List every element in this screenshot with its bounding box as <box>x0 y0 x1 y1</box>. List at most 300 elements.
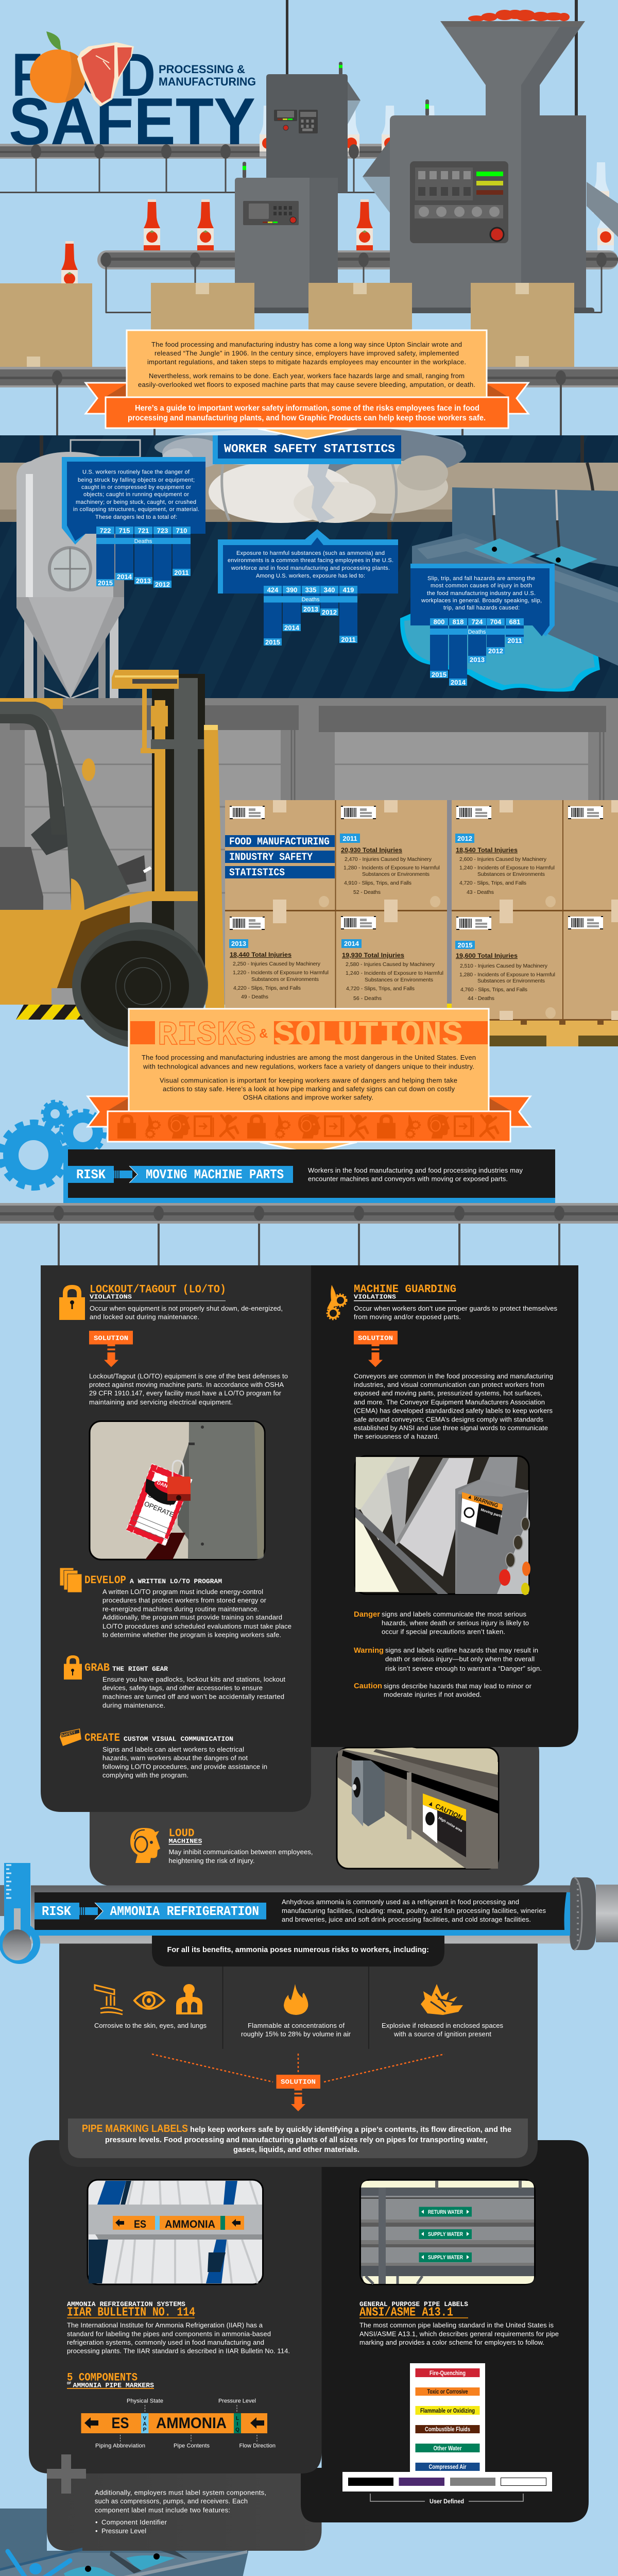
diagram: ammonia pipe marker components: AMMONIA <box>156 2415 227 2432</box>
stats: 2015: Substances or Environments <box>477 978 545 984</box>
panel: risks and solutions intro: actions to stay safe. Here’s a look at how pipe marking and safety signs can cut down on costly <box>163 1085 455 1093</box>
panel: iiar bulletin: IIAR BULLETIN NO. 114 <box>67 2306 195 2319</box>
heading: food manufacturing industry safety statistics: STATISTICS <box>229 867 285 879</box>
diagram: ammonia pipe marker components: Pressure Level <box>218 2398 256 2404</box>
illustration: lockout tag on panel door: DANGER <box>156 1480 179 1494</box>
bar chart: slip deaths: Deaths <box>468 629 486 635</box>
icon: steak <box>77 42 134 107</box>
stats: 2013: 4,220 - Slips, Trips, and Falls <box>233 985 301 991</box>
panel: ansi asme: ANSI/ASME A13.1, which describes general requirements for pipe <box>359 2330 559 2338</box>
panel: component labels: such as compressors, pumps, and receivers. Each <box>95 2497 248 2505</box>
ribbon: guide statement: processing and manufacturing plants, and how Graphic Products can help keep those workers safe. <box>128 414 486 422</box>
bar chart: struck-by deaths <box>96 527 191 588</box>
stats: 2014: 56 - Deaths <box>353 995 382 1002</box>
bar chart: exposure deaths: 335 <box>305 586 316 594</box>
panel: loud machines: heightening the risk of injury. <box>169 1857 254 1865</box>
stats: 2011 <box>340 834 440 895</box>
sign word: danger: Danger <box>354 1610 380 1619</box>
panel: component labels: Pressure Level <box>101 2527 146 2535</box>
illustration: conveyor guard with warning label: ▲ WARNING <box>467 1493 499 1509</box>
panel: ansi asme: GENERAL PURPOSE PIPE LABELS <box>359 2300 468 2308</box>
sign word: warning: death or serious injury—but only when the overall <box>385 1655 535 1663</box>
icon: torso with lungs <box>176 1984 202 2014</box>
bar chart: struck-by deaths: 2014 <box>117 573 132 581</box>
panel: component labels: • <box>95 2527 98 2535</box>
panel: machine guarding: safe around conveyors; CEMA’s designs comply with standards <box>354 1416 544 1423</box>
stats: 2014: 2014 <box>344 940 359 947</box>
panel: ansi asme <box>301 2140 589 2522</box>
step: create: CREATE <box>84 1732 120 1744</box>
icon: flame <box>284 1984 308 2015</box>
callout: pipe marking labels: pressure levels. Food processing and manufacturing plants of all sizes rely on pipes for transporting water, <box>105 2136 488 2144</box>
icon: head with ear protection <box>130 1828 160 1863</box>
diagram: ammonia pipe marker components: Physical State <box>127 2398 163 2404</box>
step: develop: DEVELOP <box>84 1574 126 1587</box>
tomatoes in hopper <box>468 10 570 22</box>
illustration: general purpose pipe labels: SUPPLY WATER <box>428 2231 463 2238</box>
callout: slips trips falls: most common causes of injury in both <box>431 583 532 589</box>
sign word: caution: signs describe hazards that may lead to minor or <box>384 1682 532 1690</box>
gears <box>1 1101 105 1188</box>
solution marker <box>276 2075 320 2111</box>
panel: ansi asme: The most common pipe labeling standard in the United States is <box>359 2321 554 2329</box>
icon: orange with leaf <box>30 31 85 103</box>
solution marker: SOLUTION <box>281 2078 316 2086</box>
risk tag: RISK <box>76 1167 106 1182</box>
panel: iiar bulletin: standard for labeling the pipes and components in ammonia-based <box>67 2330 271 2338</box>
bar chart: exposure deaths: 2011 <box>341 636 356 643</box>
conveyor with hanging panel rods <box>0 1203 618 1267</box>
bar chart: slip deaths: 2014 <box>451 679 466 686</box>
stats: 2014: 1,240 - Incidents of Exposure to Harmful <box>346 970 443 976</box>
section background: worker safety statistics <box>0 428 618 699</box>
heading: food safety: SAFETY <box>9 84 255 159</box>
ammonia risks panel: Explosive if released in enclosed spaces <box>382 2022 504 2029</box>
panel: iiar bulletin: AMMONIA PIPE MARKERS <box>73 2381 154 2389</box>
diagram: ammonia pipe marker components: I <box>237 2421 238 2427</box>
stats: 2013: 49 - Deaths <box>241 994 268 1000</box>
callout: pipe marking labels: help keep workers safe by quickly identifying a pipe’s contents, its flow direction, and the <box>190 2125 511 2134</box>
panel: machine guarding: VIOLATIONS <box>354 1293 396 1300</box>
step: grab: devices, safety tags, and other accessories to ensure <box>102 1684 263 1692</box>
panel: machine guarding: Occur when workers don’t use proper guards to protect themselves <box>354 1304 557 1312</box>
stats: 2011: Substances or Environments <box>362 871 430 877</box>
panel: component labels: component label must include two features: <box>95 2506 230 2514</box>
stats: 2013: 1,220 - Incidents of Exposure to Harmful <box>233 970 329 976</box>
panel: machine guarding: the seriousness of a hazard. <box>354 1432 439 1440</box>
panel: lockout tagout: maintaining and servicing electrical equipment. <box>89 1398 233 1406</box>
panel: risks and solutions intro: with technological advances and new regulations, workers face a variety of dangers unique to their industry. <box>143 1062 474 1071</box>
step: develop: Additionally, the program must provide training on standard <box>102 1614 282 1621</box>
stats: 2013: 2013 <box>231 940 246 947</box>
callout: slips trips falls: workplaces in general. Broadly speaking, slip, <box>421 598 542 604</box>
bar chart: struck-by deaths: 721 <box>138 527 149 535</box>
heading: risks and solutions: & <box>260 1026 268 1042</box>
sign word: warning <box>354 1646 542 1672</box>
sign word: warning: signs and labels outline hazards that may result in <box>385 1647 538 1654</box>
stats: 2011: 1,280 - Incidents of Exposure to Harmful <box>344 865 440 871</box>
callout: pipe marking labels <box>68 2119 528 2158</box>
bar chart: slip deaths: 818 <box>453 618 464 625</box>
icon: falling worker <box>8 2551 75 2576</box>
panels: iiar and ansi pipe labelling <box>29 2140 589 2551</box>
stats: 2012: 4,720 - Slips, Trips, and Falls <box>459 880 526 886</box>
panel: iiar bulletin: The International Institute for Ammonia Refrigeration (IIAR) has a <box>67 2321 263 2329</box>
solution marker <box>89 1331 133 1367</box>
bar chart: exposure deaths: Deaths <box>302 597 320 603</box>
bar chart: slip deaths: 681 <box>509 618 520 625</box>
bar chart: struck-by deaths: Deaths <box>134 538 152 545</box>
ammonia risks panel <box>59 1943 538 2167</box>
panel: intro copy: released “The Jungle” in 1906. In the century since, employers have improved safety, implemented <box>154 349 459 357</box>
panel: component labels: Additionally, employers must label system components, <box>95 2488 266 2497</box>
diagram: ammonia pipe marker components: Flow Direction <box>239 2443 276 2449</box>
stats: 2015: 4,760 - Slips, Trips, and Falls <box>460 987 527 993</box>
panel: lockout tagout: VIOLATIONS <box>90 1293 132 1300</box>
panel: machine guarding <box>311 1265 578 1747</box>
machine: hopper filler with control panel <box>363 10 586 308</box>
panel: ammonia benefits statement: For all its benefits, ammonia poses numerous risks to workers, including: <box>167 1945 429 1954</box>
stats: 2011: 4,910 - Slips, Trips, and Falls <box>344 880 411 886</box>
step: develop: LO/TO procedures and scheduled evaluations must take place <box>102 1622 291 1630</box>
ammonia risks panel: with a source of ignition present <box>393 2030 491 2038</box>
bar chart: struck-by deaths: 2012 <box>155 581 170 588</box>
bar chart: exposure deaths: 2014 <box>284 624 300 632</box>
panel: iiar bulletin: OF <box>67 2382 71 2386</box>
illustration: general purpose pipe labels <box>360 2180 535 2284</box>
risk banner: moving machine parts: Workers in the food manufacturing and food processing industries may <box>308 1166 523 1174</box>
bar chart: exposure deaths: 2015 <box>265 638 280 646</box>
illustration: ammonia pipe marker: AMMONIA <box>165 2218 215 2230</box>
diagram: ammonia pipe marker components: P <box>143 2427 147 2433</box>
fluid vat continuation with falling worker <box>0 2509 248 2576</box>
panel: risks and solutions intro: Visual communication is important for keeping workers aware of dangers and helping them take <box>160 1077 457 1084</box>
panel: machine guarding: Conveyors are common in the food processing and manufacturing <box>354 1372 553 1380</box>
illustration: general purpose pipe labels: RETURN WATER <box>428 2209 463 2215</box>
bar chart: struck-by deaths: 723 <box>157 527 168 535</box>
worker safety statistics heading: WORKER SAFETY STATISTICS <box>224 442 395 455</box>
machine: tall control tower <box>266 62 360 193</box>
callout: slips trips falls: the food manufacturing industry and U.S. <box>427 590 536 597</box>
sign word: danger: hazards, where death or serious injury is likely to <box>382 1619 529 1627</box>
sign word: danger: signs and labels communicate the most serious <box>382 1611 526 1618</box>
panel: risks and solutions intro <box>88 1009 530 1127</box>
step: create: hazards, warn workers about the dangers of not <box>102 1754 248 1762</box>
pipe flange <box>570 1877 596 1950</box>
heading: food safety <box>9 41 255 159</box>
illustration: conveyor guard with warning label: Moving parts <box>480 1508 503 1518</box>
callout: pipe marking labels: gases, liquids, and other materials. <box>233 2145 359 2154</box>
stacked boxes with statistics <box>225 800 618 1021</box>
stats: 2012: 18,540 Total Injuries <box>456 846 518 854</box>
stats: 2014: 2,580 - Injuries Caused by Machinery <box>346 961 435 968</box>
panel: intro copy: easily-overlooked wet floors to exposed machine parts that may cause severe bleeding, amputation, or death. <box>138 381 475 388</box>
chart: pipe label colour scheme: Toxic or Corrosive <box>427 2388 468 2395</box>
step: grab: Ensure you have padlocks, lockout kits and stations, lockout <box>102 1675 285 1683</box>
stats: 2014: Substances or Environments <box>365 977 433 983</box>
bar chart: exposure deaths: 424 <box>267 586 279 594</box>
intro text panel with ribbon <box>85 330 528 464</box>
bar chart: struck-by deaths: 2011 <box>174 569 189 577</box>
illustration: general purpose pipe labels: SUPPLY WATER <box>428 2255 463 2261</box>
stats: 2012: 43 - Deaths <box>467 889 494 895</box>
risk banner: ammonia refrigeration on pipe: manufacturing facilities, including: meat, poultry, and fish processing facilities, wineries <box>282 1907 546 1914</box>
bar chart: exposure deaths <box>264 586 357 646</box>
stats: 2013: 18,440 Total Injuries <box>230 951 291 958</box>
bar chart: struck-by deaths: 715 <box>119 527 130 535</box>
forklift <box>0 670 225 1048</box>
chart: pipe label colour scheme: Flammable or Oxidizing <box>420 2407 475 2414</box>
sign word: caution: moderate injuries if not avoided. <box>384 1691 482 1698</box>
sign word: warning: Warning <box>354 1646 384 1655</box>
stats: 2012: 1,240 - Incidents of Exposure to Harmful <box>459 865 555 871</box>
panel: ammonia benefits statement <box>152 1936 444 1967</box>
panel: lockout tagout: protect against moving machine parts. In accordance with OSHA <box>89 1381 284 1388</box>
illustration: caution label on conveyor: High noise area <box>438 1817 463 1833</box>
stats: 2015: 19,600 Total Injuries <box>456 952 518 959</box>
smoke and cracked pipe <box>154 428 466 523</box>
hero scene: production line <box>0 0 618 436</box>
callout: struck by / caught in <box>62 457 205 588</box>
stats: 2015: 2,510 - Injuries Caused by Machinery <box>460 963 548 969</box>
bar chart: struck-by deaths: 2015 <box>98 579 113 587</box>
panel: risks and solutions intro: The food processing and manufacturing industries are among the most dangerous in the United States. Even <box>142 1054 476 1061</box>
stats: 2015: 1,280 - Incidents of Exposure to Harmful <box>459 972 555 978</box>
panel: ansi asme: ANSI/ASME A13.1 <box>359 2306 453 2319</box>
callout: slips trips falls: trip, and fall hazards caused: <box>443 605 520 611</box>
icon: padlock small <box>64 1655 82 1680</box>
step: create: CUSTOM VISUAL COMMUNICATION <box>124 1735 233 1743</box>
title block <box>9 31 256 159</box>
risk banner: ammonia refrigeration on pipe: and breweries, juice and soft drink processing facilities, and cold storage facilities. <box>282 1916 531 1923</box>
panel: lockout tagout: 29 CFR 1910.147, every facility must have a LO/TO program for <box>89 1389 282 1397</box>
stats: 2011: 2011 <box>342 835 357 842</box>
lower conveyor <box>97 162 618 313</box>
stats: 2014: 4,720 - Slips, Trips, and Falls <box>346 986 415 992</box>
callout: struck by / caught in: U.S. workers routinely face the danger of <box>82 469 190 475</box>
sign word: danger: occur if special precautions aren’t taken. <box>382 1628 505 1635</box>
step: create <box>60 1728 267 1779</box>
diagram: ammonia pipe marker components: V <box>143 2416 147 2421</box>
step: create: following LO/TO procedures, and provide assistance in <box>102 1763 267 1770</box>
stats: 2012: 2,600 - Injuries Caused by Machinery <box>459 856 547 862</box>
bar chart: exposure deaths: 2012 <box>322 608 337 616</box>
illustration: lockout tag on panel door: OPERATE <box>143 1500 176 1519</box>
step: grab: GRAB <box>84 1662 110 1674</box>
ammonia risks panel: roughly 15% to 28% by volume in air <box>241 2030 351 2038</box>
diagram: ammonia pipe marker components: ES <box>111 2415 129 2432</box>
solution marker: SOLUTION <box>94 1334 128 1342</box>
diagram: ammonia pipe marker components: Pipe Contents <box>174 2443 210 2449</box>
heading: risks and solutions: RISKS <box>158 1016 256 1055</box>
panel: iiar bulletin: processing plants. The IIAR standard is described in IIAR Bulletin No. 114. <box>67 2347 290 2354</box>
icon: safety sign <box>60 1728 81 1746</box>
step: develop: procedures that protect workers from stored energy or <box>102 1596 267 1604</box>
panel: component labels: Component Identifier <box>101 2518 167 2526</box>
icon: corrosive hand <box>95 1985 123 2014</box>
panel: lockout tagout: Occur when equipment is not properly shut down, de-energized, <box>90 1304 283 1312</box>
step: grab: THE RIGHT GEAR <box>112 1665 168 1673</box>
callout: pipe marking labels: PIPE MARKING LABELS <box>82 2123 188 2134</box>
bar chart: slip deaths: 2012 <box>488 647 503 655</box>
panel: machine guarding: industries, and visual communication can protect workers from <box>354 1381 544 1388</box>
thermometer gauge <box>3 1863 37 1960</box>
icon: plus connector <box>47 2454 86 2494</box>
panel: intro copy: Nevertheless, work remains to be done. Each year, workers face hazards large and small, ranging from <box>149 372 465 380</box>
panel: machine guarding: and more. The Conveyor Equipment Manufacturers Association <box>354 1398 545 1406</box>
stats: 2012: Substances or Environments <box>477 871 545 877</box>
bar chart: slip deaths: 2011 <box>507 637 522 645</box>
bar chart: exposure deaths: 419 <box>343 586 354 594</box>
panel: machine guarding: from moving and/or exposed parts. <box>354 1313 461 1321</box>
solution marker <box>354 1331 398 1367</box>
panel: lockout tagout <box>41 1265 311 1812</box>
bar chart: slip deaths: 704 <box>490 618 502 625</box>
bar chart: slip deaths: 2013 <box>470 656 485 664</box>
operator silhouette and seat <box>0 752 151 910</box>
machine base <box>254 308 594 313</box>
panel: iiar bulletin: AMMONIA REFRIGERATION SYSTEMS <box>67 2300 185 2308</box>
step: develop: A WRITTEN LO/TO PROGRAM <box>130 1578 222 1585</box>
illustration: lockout tag on panel door <box>90 1421 265 1560</box>
chart: pipe label colour scheme: Compressed Air <box>428 2463 467 2470</box>
diagram: ammonia pipe marker components <box>81 2398 276 2449</box>
panel: machine guarding: exposed and moving parts, pressurized systems, hot surfaces, <box>354 1389 542 1397</box>
bar chart: slip deaths: 724 <box>472 618 483 625</box>
illustration: ammonia pipe marker: ES <box>134 2218 146 2230</box>
callout: slips trips falls: Slip, trip, and fall hazards are among the <box>427 575 535 582</box>
panel: ansi asme: marking and provides a color scheme for employers to follow. <box>359 2338 544 2346</box>
warehouse wall <box>0 698 618 1021</box>
bar chart: exposure deaths: 2013 <box>303 605 318 613</box>
ribbon: guide statement <box>106 397 508 439</box>
panel: component labels: • <box>95 2518 98 2526</box>
bar chart: exposure deaths: 340 <box>324 586 335 594</box>
panel: intro copy: The food processing and manufacturing industry has come a long way since Upton Sinclair wrote and <box>151 341 462 348</box>
panel: iiar bulletin: refrigeration systems, commonly used in food manufacturing and <box>67 2338 264 2346</box>
heading: risks and solutions <box>130 1016 488 1055</box>
subheading: MANUFACTURING <box>159 75 256 88</box>
step: create: Signs and labels can alert workers to electrical <box>102 1745 244 1753</box>
callout: harmful substances: Among U.S. workers, exposure has led to: <box>256 573 365 579</box>
risk banner: moving machine parts: encounter machines and conveyors with moving or exposed parts. <box>308 1175 508 1183</box>
stats: 2013: 2,250 - Injuries Caused by Machinery <box>233 961 321 967</box>
step: develop <box>60 1568 291 1638</box>
bar chart: slip deaths: 800 <box>434 618 444 625</box>
upper conveyor <box>0 106 438 193</box>
stats: 2014 <box>341 939 443 1002</box>
panel: machine guarding: MACHINE GUARDING <box>354 1283 456 1296</box>
sign word: danger <box>354 1610 529 1635</box>
sign word: caution: Caution <box>354 1682 382 1690</box>
heading: food manufacturing industry safety statistics <box>225 835 335 879</box>
stats: 2013: Substances or Environments <box>251 976 319 982</box>
machine: small keypad unit <box>235 162 338 308</box>
callout: struck by / caught in: machinery; or being stuck, caught, or crushed <box>76 499 196 505</box>
subheading <box>159 63 256 88</box>
ribbon tails <box>85 383 528 414</box>
illustration: ammonia pipe marker <box>88 2180 263 2284</box>
risk tag <box>35 1903 266 1920</box>
panel: lockout tagout: LOCKOUT/TAGOUT (LO/TO) <box>90 1283 226 1296</box>
callout: struck by / caught in: These dangers led to a total of: <box>95 514 177 520</box>
panel: loud machines <box>90 1731 539 1886</box>
icon: eye <box>134 1992 164 2009</box>
pallet <box>487 1021 618 1046</box>
ribbon tails <box>88 1096 530 1127</box>
callout: harmful substances <box>218 529 398 646</box>
chart: pipe label colour scheme: User Defined <box>430 2498 464 2505</box>
step: grab: machines are turned off and won’t be accidentally restarted <box>102 1693 284 1700</box>
callout: harmful substances: workforce and in food manufacturing and processing plants. <box>231 565 390 571</box>
silo tank <box>16 440 140 699</box>
diagram: ammonia pipe marker components: Piping Abbreviation <box>95 2443 145 2449</box>
icon: stacked documents <box>60 1568 82 1592</box>
cardboard boxes <box>0 283 574 367</box>
illustration: conveyor guard with warning label <box>355 1456 530 1595</box>
panel: machine guarding: (CEMA) has developed standardized safety labels to keep workers <box>354 1406 553 1415</box>
stats: 2012 <box>455 834 555 895</box>
risk tag: MOVING MACHINE PARTS <box>146 1167 284 1182</box>
chart: pipe label colour scheme <box>342 2363 552 2505</box>
bar chart: exposure deaths: 390 <box>286 586 297 594</box>
risk tag <box>68 1166 293 1183</box>
step: develop: A written LO/TO program must include energy-control <box>102 1588 263 1596</box>
panel: intro copy: important regulations, and taken steps to mitigate hazards employees may encounter in the workplace. <box>147 358 466 366</box>
panel: risks and solutions intro: OSHA citations and improve worker safety. <box>243 1093 373 1101</box>
stats: 2011: 2,470 - Injuries Caused by Machinery <box>345 856 432 862</box>
icon: safety sign: SAFETY <box>61 1731 76 1738</box>
diagram: ammonia pipe marker components: L <box>236 2416 239 2421</box>
illustration: caution label on conveyor: ▲ CAUTION <box>427 1799 464 1821</box>
risk tag: AMMONIA REFRIGERATION <box>110 1904 259 1919</box>
bar chart: slip deaths: 2015 <box>432 671 447 679</box>
chart: pipe label colour scheme: Other Water <box>434 2445 462 2452</box>
diagram: ammonia pipe marker components: Q <box>235 2427 239 2433</box>
stats: 2011: 52 - Deaths <box>353 889 381 895</box>
illustration: lockout tag on panel door: DO NOT <box>147 1491 174 1508</box>
illustration: caution label on conveyor <box>337 1748 499 1869</box>
chart: pipe label colour scheme: Combustible Fluids <box>425 2426 470 2433</box>
callout: struck by / caught in: caught in or compressed by equipment or <box>81 484 191 490</box>
callout: struck by / caught in: in collapsing structures, equipment, or material. <box>73 506 199 513</box>
icon: explosion <box>421 1984 463 2015</box>
step: create: complying with the program. <box>102 1771 188 1779</box>
stats: 2015: 2015 <box>458 941 472 949</box>
forklift body <box>0 878 198 1020</box>
panel: intro copy <box>127 330 487 397</box>
step: grab <box>64 1655 285 1709</box>
worker safety statistics heading <box>213 435 401 464</box>
ribbon: guide statement: Here’s a guide to important worker safety information, some of the risks employees face in food <box>135 404 479 413</box>
icon: padlock <box>59 1285 85 1320</box>
heading: food safety: FOOD <box>12 41 156 109</box>
ribbon with risk icons <box>108 1111 510 1153</box>
bar chart: struck-by deaths: 2013 <box>136 577 151 585</box>
panel: loud machines: May inhibit communication between employees, <box>169 1848 313 1856</box>
panel: loud machines: MACHINES <box>169 1838 202 1845</box>
sign word: caution <box>354 1682 532 1698</box>
heading: risks and solutions: SOLUTIONS <box>274 1016 463 1055</box>
subheading: PROCESSING & <box>159 63 245 76</box>
heading: food manufacturing industry safety statistics: INDUSTRY SAFETY <box>229 852 313 863</box>
bar chart: struck-by deaths: 722 <box>100 527 111 535</box>
panel: component labels <box>47 2473 321 2551</box>
stats: 2014: 19,930 Total Injuries <box>342 952 404 959</box>
diagram: ammonia pipe marker components: A <box>143 2421 147 2427</box>
bar chart: struck-by deaths: 710 <box>176 527 187 535</box>
step: grab: during maintenance. <box>102 1701 165 1709</box>
